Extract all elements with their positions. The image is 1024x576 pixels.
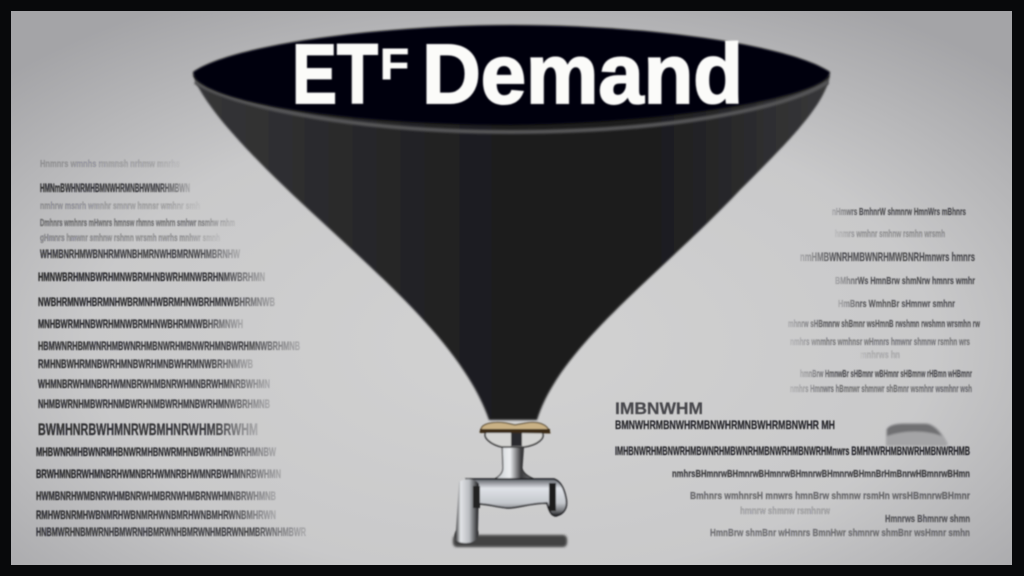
faucet spout body <box>466 479 567 516</box>
right line 5: HmBnrs WmhnBr sHmnwr smhnr <box>838 298 955 310</box>
text block: right column (illegible source text, filler glyphs) <box>788 206 980 395</box>
faucet leg dark stripe <box>473 486 480 508</box>
funnel rim highlight <box>195 82 828 132</box>
title: Demand <box>422 27 743 121</box>
left line 14: BWMHNRBWHMNRWBMHNRWHMBRWHM <box>38 420 258 439</box>
lower heading line 2: BMNWHRMBNWHRMBNWHRMNBWHRMBNWHR MH <box>615 418 835 432</box>
lower heading line 1: IMBNWHM <box>615 399 703 418</box>
faucet ground shadow <box>453 535 567 547</box>
right line 2: hnmrs wmhnr smhnw rsmhn wrsmh <box>835 228 945 240</box>
icon: faucet <box>453 422 567 547</box>
left line 12: WHMNBRWHMNBRHWMNBRWHMBNRWHMNBRWHMNRBWHMN <box>38 377 270 391</box>
icon: grey badge <box>886 423 948 446</box>
right line 8: mnhrws hn <box>860 349 900 361</box>
faucet flange band <box>480 429 550 433</box>
left line 7: HMNWBRHMNBWRHMNWBRMHNBWRHMNWBRHNMWBRHMN <box>38 270 265 284</box>
left line 5: gHmnrs hmwnr smhnw rshmn wrsmh nwrhs mnhwr smnh <box>40 232 220 244</box>
faucet collar shadow <box>511 433 522 446</box>
faucet collar <box>485 432 543 447</box>
funnel <box>193 25 830 420</box>
faucet gold flange <box>480 422 550 433</box>
title <box>292 27 743 121</box>
badge body <box>886 423 948 446</box>
left line 15: MHBWNRMHBWNRMHBNWRMHBNWRMHNBWRMHNBWRHMNBW <box>36 445 276 459</box>
left line 2: HMNmBWHNRMHBMNWHRMNBHWMNRHMBWN <box>40 181 190 195</box>
left line 6: WHMBNRHMWBNHRMWNBHMRNWHBMRNWHMBRNHW <box>40 247 240 261</box>
title: ET <box>292 27 378 121</box>
left line 10: HBMWNRHBMWNRHMBWNRHMBNWRHMBNWRHMNBWRHMNWBRHMNB <box>38 339 300 353</box>
left line 18: RMHWBNRMHWBNMRHWBNMRHWNBMRHWNBMHRWNBMHRWN <box>36 508 276 522</box>
left line 19: HNBMWRHNBMWRNHBMWRNHBMRWNHBMRWNHMBRWNHMBRWNHMBWR <box>36 525 306 539</box>
left line 17: HWMBNRHWMBNRWHMBNRWHMBRNWHMBRNWHMNBRWHMNB <box>36 489 276 503</box>
faucet spout dark stripe <box>549 483 556 511</box>
text block: left column (illegible source text, filler glyphs) <box>36 158 306 539</box>
left line 13: NHMBWRNHMBWRHNMBWRHNMBWRHMNBWRHMNWBRHMNB <box>38 397 270 411</box>
badge top edge <box>887 424 942 436</box>
funnel opening <box>193 25 830 125</box>
left line 4: Dmhnrs wmhnrs mHwnrs hmnsw rhmns wmhrn smhwr nsmhw rnhm <box>40 217 235 229</box>
left line 3: nmhrw msnrh wmnhr smnrw hmnsr wmhnr smh <box>40 200 200 212</box>
left line 11: RMHNBWHRMNBWRHMNBWRHMNBWHRMNWBRHNMWB <box>38 357 253 371</box>
left line 1: Hnmnrs wmnhs rmmnsh nrhmw mnrhs <box>40 158 180 170</box>
funnel cone <box>193 75 830 420</box>
faucet leg <box>454 479 479 543</box>
left line 8: NWBHRMNWHBRMNHWBRMNHWBRMHNWBRHMNWBHRMNWB <box>38 295 275 309</box>
left line 9: MNHBWRMHNBWRHMNWBRMHNWBHRMNWBHRMNWH <box>38 317 243 331</box>
text block: lower right (illegible source text, filler glyphs) <box>615 399 970 539</box>
lower line 6: hmnrw shmnw rsmhnrw <box>740 505 831 517</box>
lower line 7: Hmnrws Bhmnrw shmn <box>885 513 970 525</box>
title: F <box>380 40 409 89</box>
faucet neck <box>490 440 540 481</box>
left line 16: BRWHMNBRWHMNBRHWMNBRHWMNRBHWMNRBWHMNRBWHMN <box>36 467 281 481</box>
